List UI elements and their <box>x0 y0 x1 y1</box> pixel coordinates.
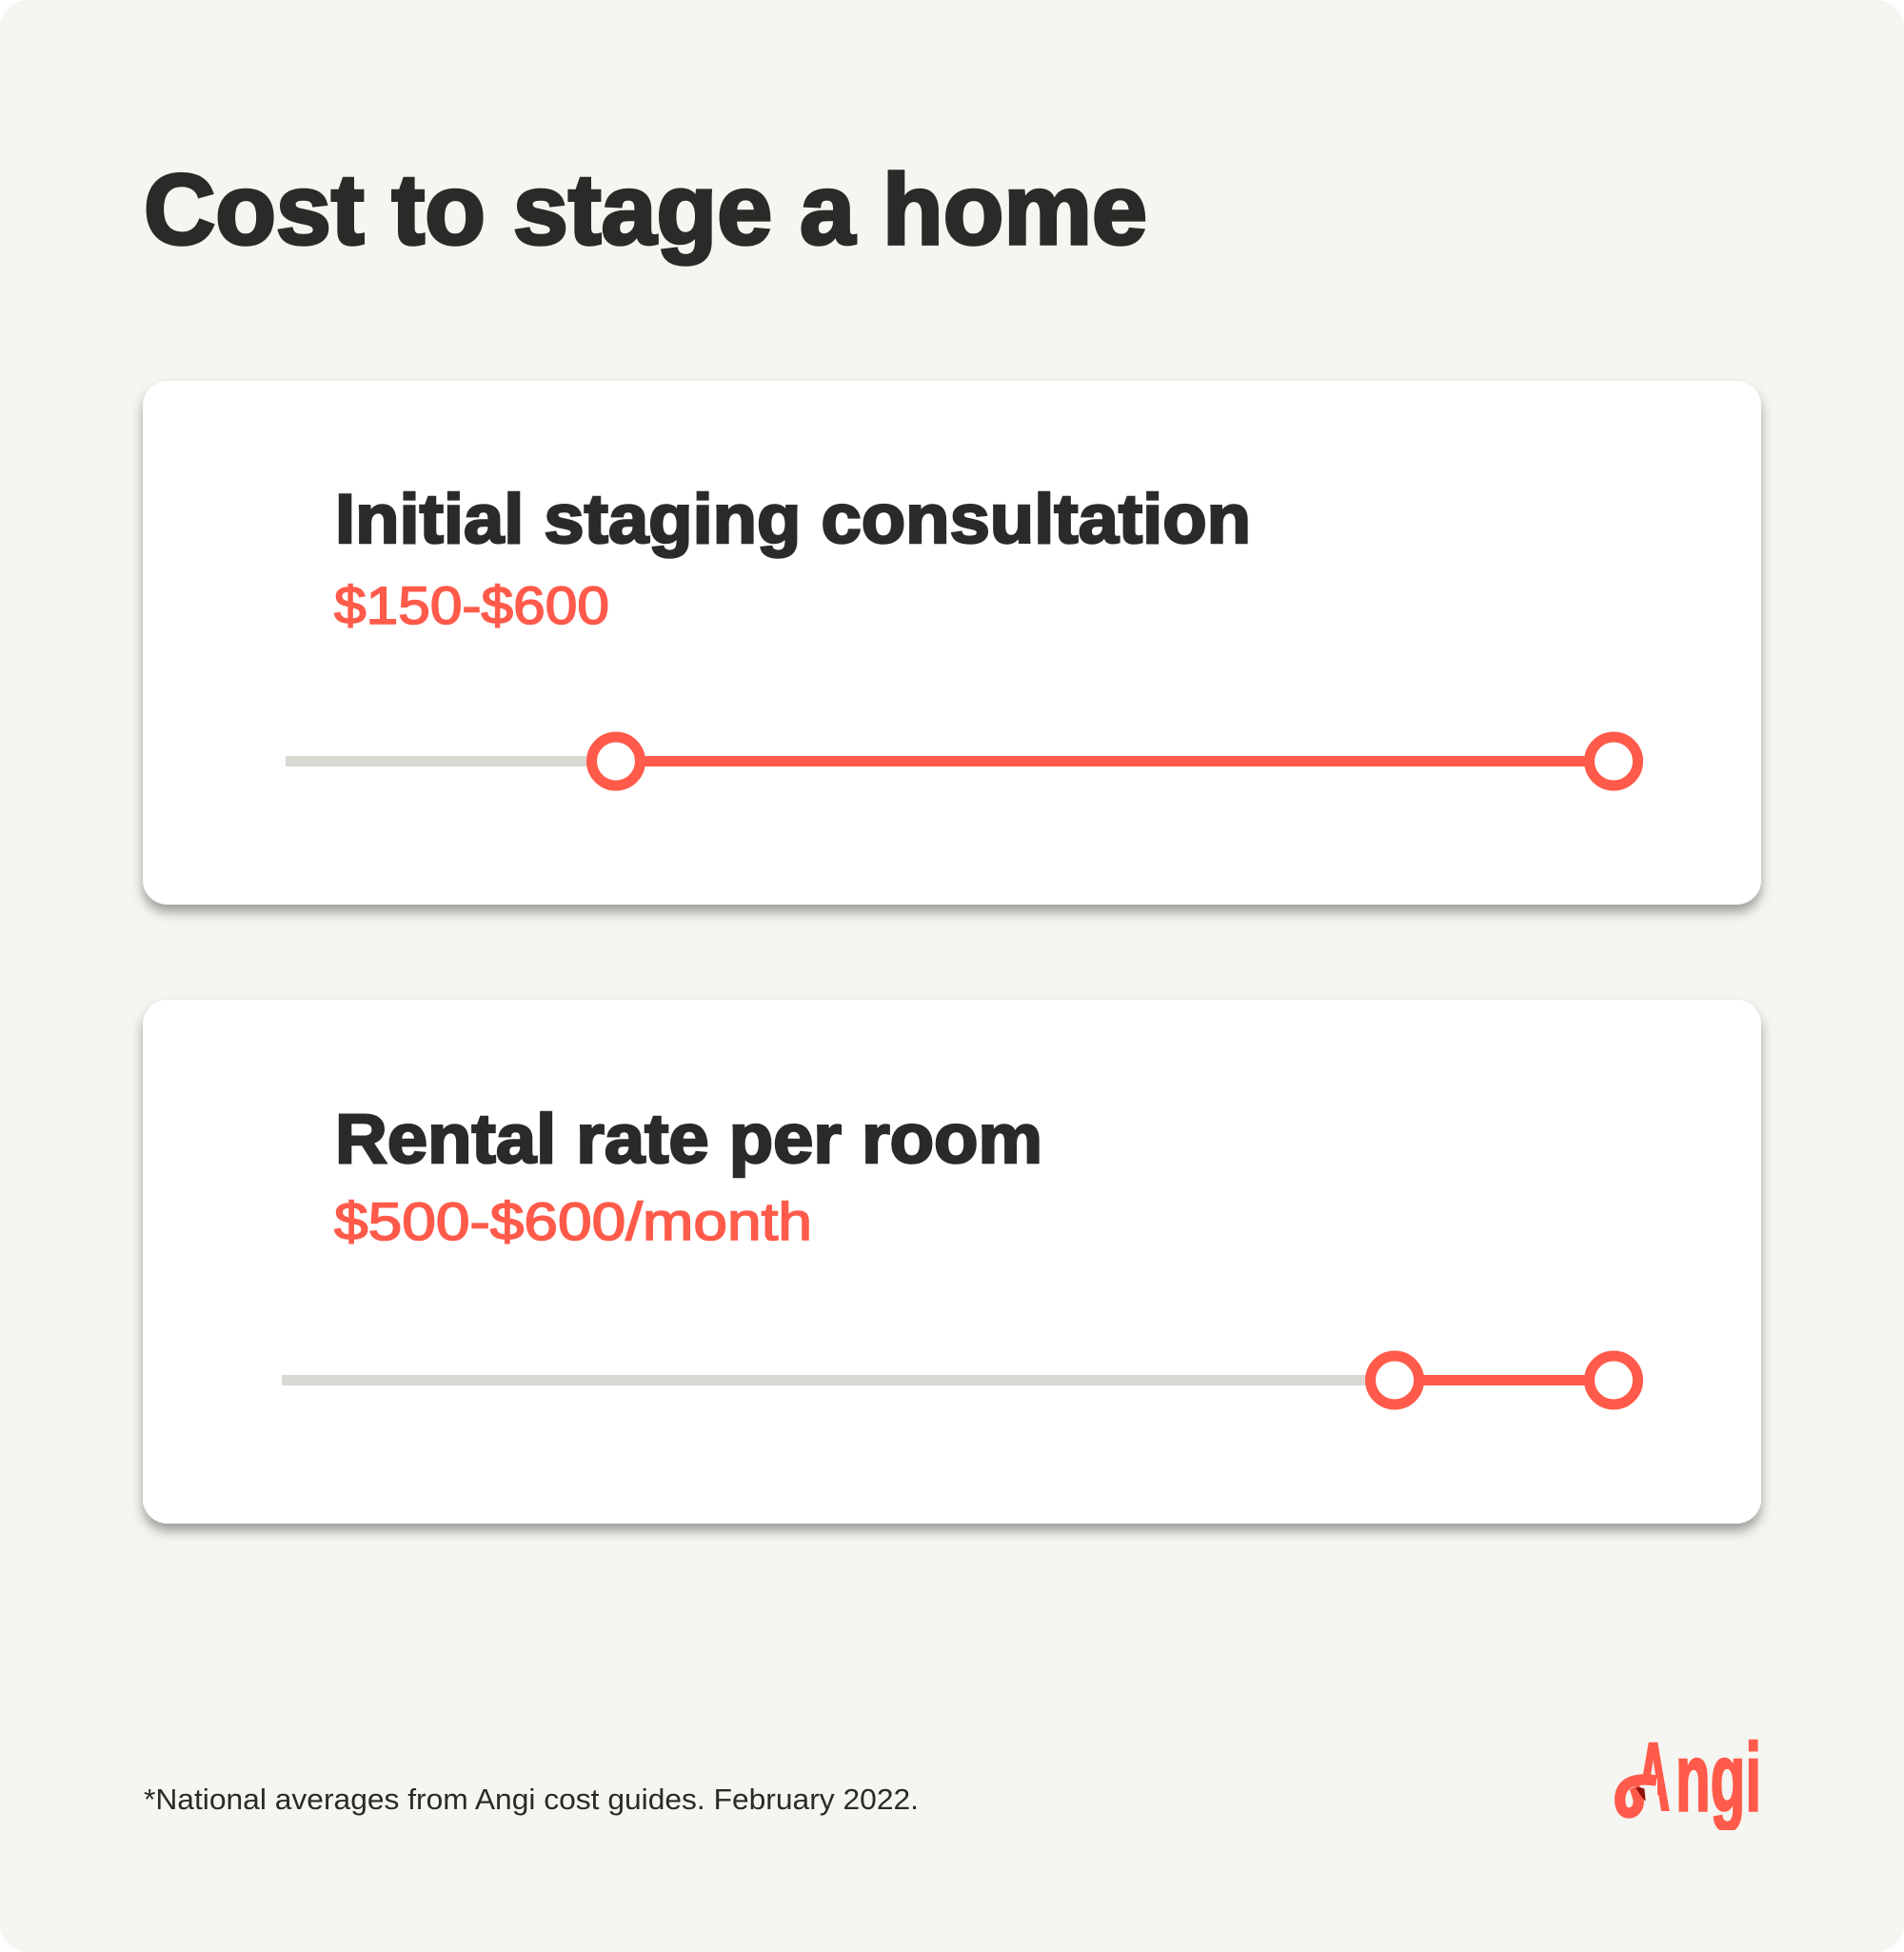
card background <box>143 1000 1761 1524</box>
range slider <box>286 737 1637 786</box>
footnote: *National averages from Angi cost guides. February 2022. <box>144 1783 919 1816</box>
title: Cost to stage a home <box>144 154 1147 266</box>
panel: rental rate per room <box>143 1000 1761 1524</box>
logo: Angi: A <box>1636 1725 1670 1832</box>
price range: $150-$600 <box>334 575 609 635</box>
logo: Angi <box>1615 1739 1758 1830</box>
heading: Initial staging consultation <box>335 481 1251 558</box>
heading: Rental rate per room <box>335 1101 1042 1178</box>
panel: initial staging consultation <box>143 381 1761 905</box>
price range: $500-$600/month <box>334 1191 812 1251</box>
range slider <box>282 1356 1637 1404</box>
card background <box>143 381 1761 905</box>
logo: Angi: ngi <box>1676 1725 1761 1832</box>
